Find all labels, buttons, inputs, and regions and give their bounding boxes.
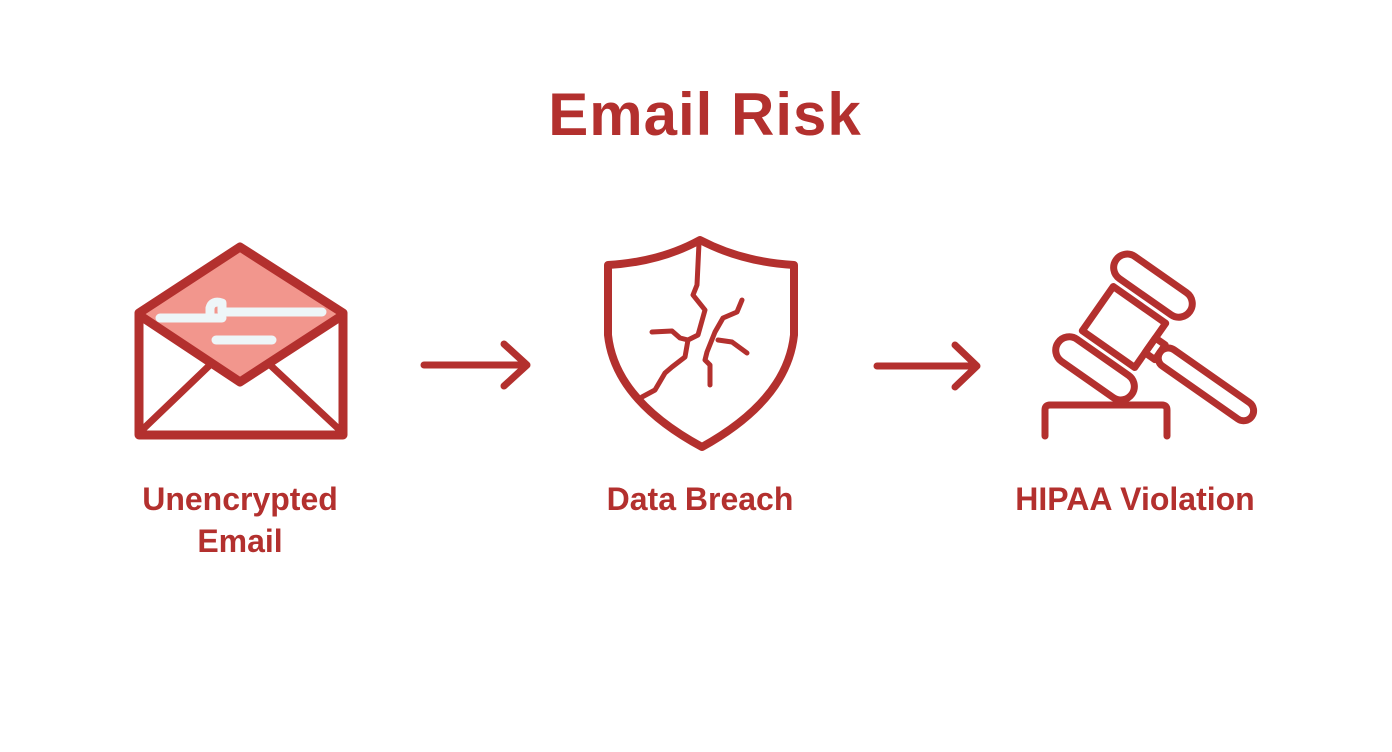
arrow 2 [877,345,977,387]
icon: gavel [1045,249,1288,469]
label: unencrypted email [142,481,338,559]
label: unencrypted email: Unencrypted [142,481,338,517]
label: data breach: Data Breach [607,481,793,517]
icon: open envelope [139,247,343,435]
icon: cracked shield [608,240,794,447]
label: hipaa violation: HIPAA Violation [1015,481,1255,517]
label: unencrypted email: Email [197,523,283,559]
arrow 1 [424,344,527,386]
title: Email Risk [548,81,862,148]
